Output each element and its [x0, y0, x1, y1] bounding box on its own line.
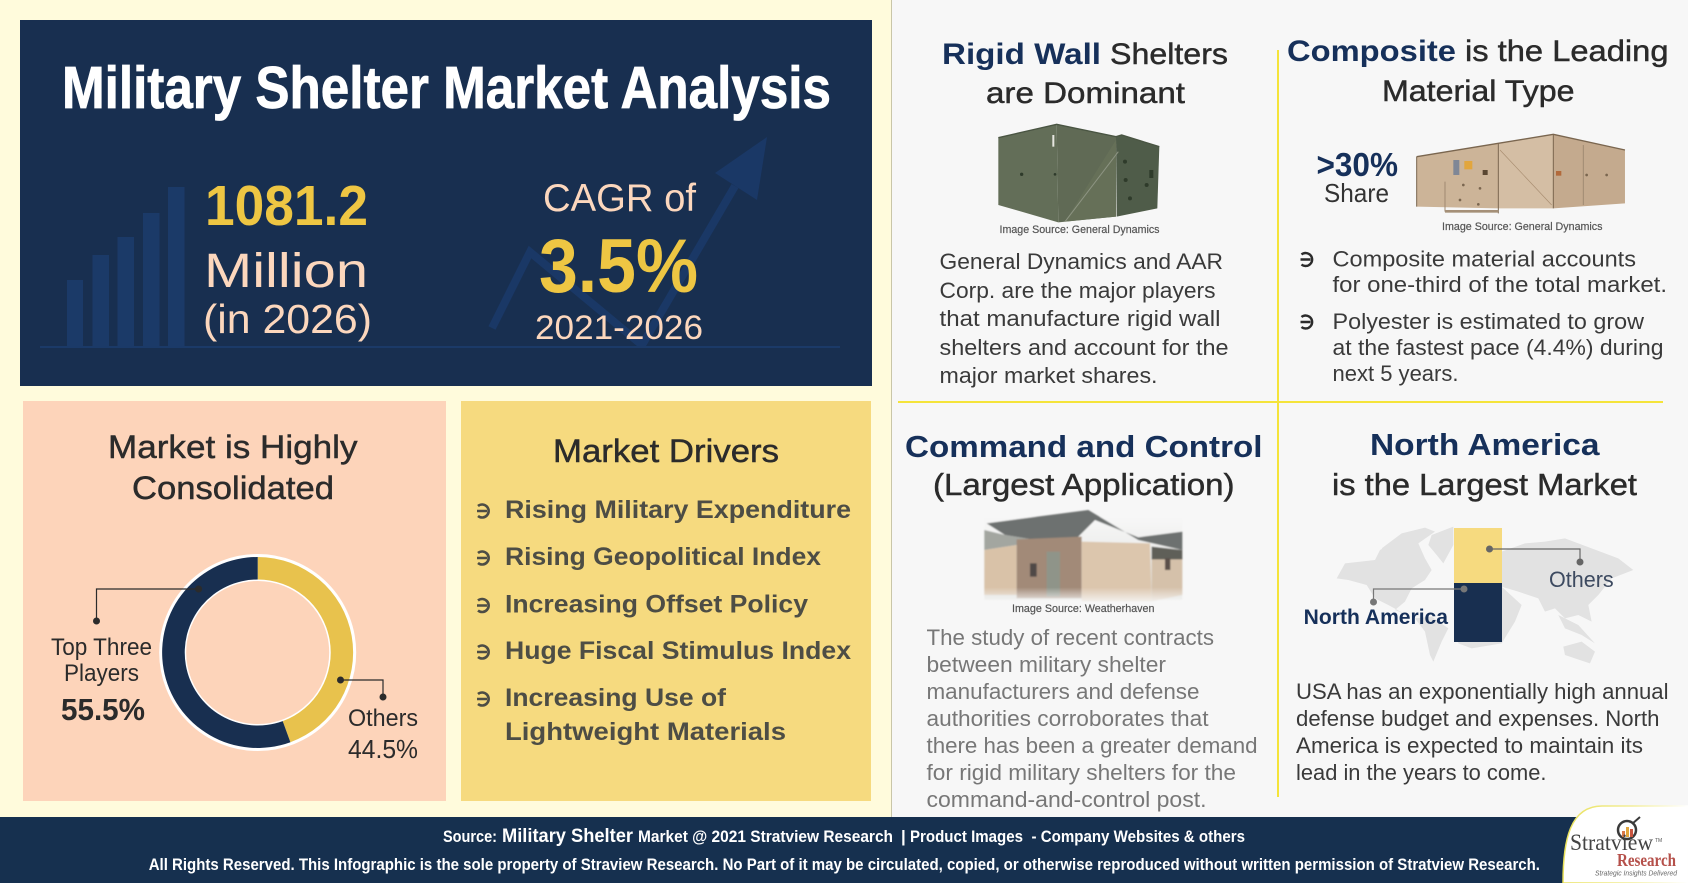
caption: Image Source: General Dynamics — [1000, 224, 1160, 236]
source line — [443, 826, 1245, 847]
heading: market is highly consolidated: Market is Highly — [108, 429, 358, 465]
heading: command and control: Command and Control — [905, 429, 1262, 464]
heading: composite: Material Type — [1382, 75, 1574, 108]
heading: composite — [1287, 35, 1668, 108]
text block: USA has an exponentially high annual — [1296, 679, 1668, 704]
leader: others — [1486, 546, 1584, 566]
source line: Military Shelter — [502, 826, 634, 847]
bullet list — [1300, 246, 1667, 386]
driver: rising geopolitical index: Rising Geopolitical Index — [505, 543, 821, 571]
source line: Product Images — [910, 827, 1023, 846]
heading: command and control — [905, 429, 1262, 502]
stat: share — [1316, 146, 1398, 208]
caption: Image Source: General Dynamics — [1442, 221, 1603, 233]
image: field tent shelter — [982, 510, 1185, 604]
source line: Source: — [443, 827, 497, 846]
heading: north america — [1332, 427, 1637, 502]
bullet: polyester growth: Polyester is estimated to grow — [1332, 309, 1645, 334]
source line: | — [901, 827, 906, 846]
heading: north america: North America — [1370, 427, 1600, 462]
label: top three players 55.5% — [51, 634, 152, 727]
driver: increasing offset policy: Increasing Offset Policy — [505, 590, 808, 618]
heading: command and control: (Largest Application) — [933, 467, 1234, 502]
bullet: polyester growth: next 5 years. — [1332, 361, 1458, 386]
arrow: upward trend — [492, 137, 767, 362]
heading: market drivers: Market Drivers — [553, 433, 779, 469]
leader: others — [337, 676, 386, 700]
donut chart — [162, 557, 353, 748]
text block: command-and-control post. — [926, 787, 1206, 812]
stat: share: Share — [1324, 178, 1389, 208]
market size value: 1081.2 — [205, 174, 368, 238]
CAGR value: CAGR of — [543, 177, 696, 220]
stat: share: >30% — [1316, 146, 1398, 183]
text block: The study of recent contracts — [926, 625, 1214, 650]
image: tan composite shelter — [1417, 134, 1625, 213]
market size value — [203, 174, 372, 342]
logo: stratview research: Research — [1617, 850, 1676, 870]
heading: market is highly consolidated — [108, 429, 358, 506]
bullet: composite share: for one-third of the total market. — [1332, 272, 1667, 297]
text block — [940, 249, 1228, 388]
text block: for rigid military shelters for the — [926, 760, 1236, 785]
heading: rigid wall shelters: Shelters — [1110, 38, 1228, 71]
driver: lightweight materials — [477, 684, 786, 746]
bullet: polyester growth: at the fastest pace (4.4%) during — [1332, 335, 1664, 360]
heading: composite: is the Leading — [1465, 35, 1668, 68]
panel: market consolidation — [23, 401, 446, 801]
world map — [1337, 527, 1633, 663]
leader: top three players — [93, 586, 202, 624]
bar chart: growth backdrop — [67, 187, 184, 347]
text block — [1296, 679, 1668, 785]
source line: - Company Websites & others — [1032, 827, 1245, 846]
footer — [0, 817, 1688, 883]
market size value: Million — [204, 245, 368, 298]
heading: rigid wall shelters: Rigid Wall — [942, 38, 1101, 71]
text block: between military shelter — [926, 652, 1167, 677]
panel: rigid wall shelters — [940, 38, 1228, 388]
logo: stratview research: Stratview — [1570, 830, 1653, 855]
panel: market size header — [20, 20, 872, 386]
bullet: polyester growth — [1300, 309, 1664, 386]
panel: north america — [1296, 427, 1668, 785]
CAGR value: 2021-2026 — [535, 309, 703, 347]
label: north america: North America — [1304, 606, 1448, 629]
CAGR value: 3.5% — [539, 224, 698, 309]
label: top three players 55.5%: Players — [64, 660, 139, 687]
text block: Corp. are the major players — [940, 278, 1216, 303]
label: top three players 55.5%: 55.5% — [61, 692, 145, 727]
text block: defense budget and expenses. North — [1296, 706, 1660, 731]
title: Military Shelter Market Analysis — [62, 55, 831, 121]
label: others 44.5% — [348, 705, 418, 764]
icon: magnifier with bars — [1618, 817, 1640, 839]
stacked bar — [1454, 528, 1502, 642]
text block: America is expected to maintain its — [1296, 733, 1643, 758]
panel: composite material — [1287, 35, 1668, 386]
heading: rigid wall shelters: are Dominant — [986, 77, 1186, 110]
text block: shelters and account for the — [940, 335, 1228, 360]
rights line: All Rights Reserved. This Infographic is the sole property of Straview Research. No Part of it may be circulated, copied, or otherwise reproduced without written permission of Stratview Research. — [149, 855, 1540, 874]
driver: huge fiscal stimulus index: Huge Fiscal Stimulus Index — [505, 637, 851, 665]
label: others 44.5%: Others — [348, 705, 418, 732]
driver: lightweight materials: Lightweight Materials — [505, 718, 786, 746]
driver: lightweight materials: Increasing Use of — [505, 684, 727, 712]
CAGR value — [535, 177, 703, 347]
market size value: (in 2026) — [203, 296, 372, 342]
heading: rigid wall shelters — [942, 38, 1228, 110]
panel: command and control — [905, 429, 1262, 812]
label: others: Others — [1549, 567, 1614, 592]
leader: north america — [1370, 586, 1468, 606]
text block: lead in the years to come. — [1296, 760, 1546, 785]
logo: stratview research: Strategic Insights Delivered — [1595, 868, 1678, 878]
bullet: composite share: Composite material accounts — [1332, 246, 1636, 272]
panel: market drivers — [461, 401, 871, 801]
heading: north america: is the Largest Market — [1332, 467, 1637, 502]
label: others 44.5%: 44.5% — [348, 734, 418, 764]
image: green rigid wall shelter — [998, 124, 1159, 222]
logo: stratview research: TM — [1655, 838, 1662, 844]
heading: composite: Composite — [1287, 35, 1456, 68]
text block — [926, 625, 1258, 812]
source line: Market @ 2021 Stratview Research — [638, 827, 893, 846]
bullet: composite share — [1300, 246, 1667, 297]
text block: there has been a greater demand — [926, 733, 1258, 758]
label: top three players 55.5%: Top Three — [51, 634, 152, 661]
caption: Image Source: Weatherhaven — [1012, 603, 1154, 615]
text block: manufacturers and defense — [926, 679, 1200, 704]
driver list — [477, 496, 851, 746]
text block: that manufacture rigid wall — [940, 306, 1220, 331]
text block: General Dynamics and AAR — [940, 249, 1223, 274]
text block: major market shares. — [940, 363, 1158, 388]
text block: authorities corroborates that — [926, 706, 1209, 731]
logo: stratview research — [1563, 806, 1688, 883]
driver: rising military expenditure: Rising Military Expenditure — [505, 496, 851, 524]
heading: market is highly consolidated: Consolidated — [132, 470, 334, 506]
